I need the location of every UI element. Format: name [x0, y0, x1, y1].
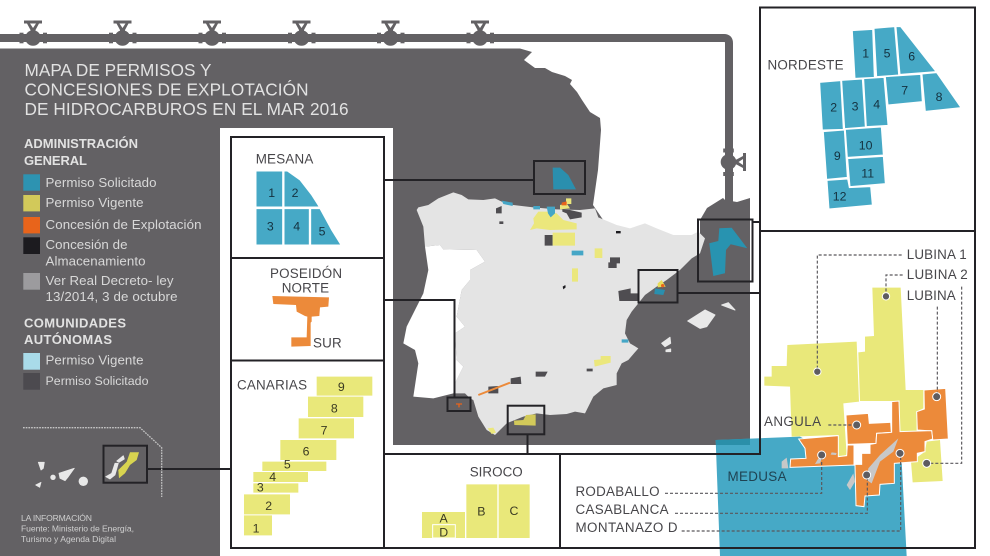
legend: comunidades autónomas: Permiso Solicitado — [46, 374, 149, 388]
panel: Nordeste: 9 — [834, 149, 841, 163]
panel: Siroco: A — [440, 512, 449, 526]
panel: Canarias: 1 — [253, 522, 260, 536]
Balearic islands — [662, 303, 735, 352]
panel: Canarias: 4 — [269, 470, 276, 484]
panel: Lubina map — [665, 255, 962, 556]
labels: Lubina panel: LUBINA 1 — [907, 247, 967, 262]
valve 5 — [377, 20, 404, 46]
legend: administración general: Permiso Vigente — [46, 195, 144, 210]
leader lines — [665, 255, 962, 531]
panel: Poseidón — [270, 266, 342, 350]
heading: POSEIDÓN — [270, 266, 342, 281]
grey fields — [782, 438, 898, 490]
legend: comunidades autónomas — [23, 316, 149, 390]
legend: administración general — [23, 136, 201, 304]
panel: Nordeste: 11 — [861, 166, 874, 180]
panel: Mesana: 4 — [293, 220, 300, 234]
swatch: permiso vigente — [23, 353, 40, 370]
dotted border — [23, 428, 162, 497]
panel: Nordeste — [768, 27, 961, 209]
Lubina 1 block — [764, 342, 859, 457]
panel: Mesana: 3 — [267, 220, 274, 234]
Portugal land — [403, 245, 485, 398]
title: MAPA DE PERMISOS Y — [24, 60, 212, 80]
labels: Lubina panel: ANGULA — [764, 414, 821, 429]
panel: Mesana: 2 — [292, 186, 299, 200]
panel: Canarias: 6 — [303, 444, 310, 458]
valve 3 — [198, 20, 226, 46]
legend: comunidades autónomas: AUTÓNOMAS — [24, 332, 112, 347]
heading: NORDESTE — [768, 58, 844, 72]
legend: administración general: Almacenamiento — [46, 254, 146, 269]
title: DE HIDROCARBUROS EN EL MAR 2016 — [24, 99, 348, 119]
legend: administración general: Concesión de — [46, 237, 128, 252]
Angula concession — [846, 413, 891, 444]
title — [24, 60, 348, 119]
panel: Nordeste: 3 — [852, 99, 859, 113]
source — [21, 513, 134, 544]
legend: comunidades autónomas: COMUNIDADES — [24, 316, 126, 331]
map of Spain — [403, 168, 735, 435]
onshore dark permits — [488, 206, 638, 393]
swatch: permiso vigente — [23, 195, 40, 211]
Lubina 2 block — [858, 288, 923, 432]
islands — [36, 456, 124, 487]
Rodaballo, Casablanca and Montanazo concessions — [790, 401, 933, 507]
panel: Nordeste: 10 — [859, 139, 873, 153]
panel: Nordeste: 7 — [901, 84, 908, 98]
source: LA INFORMACIÓN — [21, 513, 92, 523]
source: Turismo y Agenda Digital — [21, 534, 116, 544]
legend: administración general: Concesión de Explotación — [46, 217, 202, 232]
Medusa block — [716, 437, 907, 556]
legend: comunidades autónomas: Permiso Vigente — [46, 353, 144, 368]
legend: administración general: GENERAL — [24, 153, 87, 168]
legend: administración general: 13/2014, 3 de octubre — [46, 289, 178, 304]
panel: Canarias: 7 — [321, 423, 328, 437]
Medusa overlap with sea — [716, 439, 750, 445]
Nordeste mini — [709, 228, 747, 276]
panel: Siroco: D — [439, 526, 448, 540]
panel: Canarias: 5 — [284, 457, 291, 471]
panel: Nordeste: 5 — [884, 46, 891, 60]
panel: Siroco — [422, 465, 530, 540]
swatch: concesión de almacenamiento — [23, 237, 40, 254]
panel: Siroco: C — [510, 504, 519, 518]
legend: administración general: ADMINISTRACIÓN — [24, 136, 138, 151]
onshore orange spot — [562, 201, 567, 205]
heading: CANARIAS — [237, 378, 307, 393]
title: CONCESIONES DE EXPLOTACIÓN — [24, 80, 308, 100]
Spain land — [417, 192, 705, 435]
Lubina concession — [917, 388, 948, 440]
labels: Lubina panel: LUBINA 2 — [907, 267, 968, 282]
Poseidón block — [272, 296, 329, 347]
swatch: permiso solicitado — [23, 174, 40, 191]
lower right block — [911, 440, 943, 482]
dark sea background — [0, 48, 750, 556]
labels: Lubina panel: MONTANAZO D — [576, 520, 678, 535]
labels: Lubina panel: LUBINA — [907, 288, 956, 303]
Canary Islands inset — [23, 428, 162, 497]
vertical valve — [721, 148, 746, 176]
panel: Nordeste: 2 — [830, 101, 837, 115]
heading: MESANA — [256, 151, 313, 166]
panel: Canarias: 3 — [257, 480, 264, 494]
source: Fuente: Ministerio de Energía, — [21, 524, 134, 534]
panel: Nordeste: 4 — [873, 98, 880, 112]
swatch: permiso solicitado — [23, 373, 40, 390]
legend: administración general: Permiso Solicitado — [46, 175, 156, 190]
panel: Mesana: 5 — [319, 224, 326, 238]
panel: Canarias — [237, 377, 372, 536]
panel: Poseidón: NORTE — [282, 281, 329, 296]
panel: Nordeste: 1 — [862, 46, 869, 60]
panel: Nordeste: 8 — [936, 90, 943, 104]
legend: administración general: Ver Real Decreto- ley — [46, 273, 174, 288]
Mesana mini — [553, 168, 576, 189]
labels: Lubina panel — [576, 247, 968, 535]
panel: Canarias: 9 — [338, 380, 345, 394]
Siroco mini — [514, 414, 536, 426]
onshore black storage — [563, 231, 621, 289]
permit strip — [118, 452, 139, 478]
valve 2 — [109, 20, 136, 46]
panel: Canarias: 2 — [265, 499, 272, 513]
panel: Mesana: 1 — [268, 186, 275, 200]
labels: Lubina panel: MEDUSA — [728, 469, 787, 484]
panel: Poseidón: SUR — [313, 335, 342, 350]
Lubina mini — [654, 280, 666, 295]
panel: Mesana — [256, 151, 341, 245]
labels: Lubina panel: CASABLANCA — [576, 502, 669, 517]
panel: Nordeste: 6 — [908, 49, 915, 63]
labels: Lubina panel: RODABALLO — [576, 484, 660, 499]
Poseidon mini — [456, 403, 462, 407]
pipeline with valves — [0, 20, 746, 205]
swatch: real decreto — [23, 273, 40, 290]
onshore blue permits — [502, 201, 628, 343]
heading: SIROCO — [470, 465, 523, 480]
swatch: concesión de explotación — [23, 217, 40, 233]
valve 6 — [466, 20, 494, 46]
onshore yellow permits — [488, 198, 611, 434]
onshore concession line — [478, 383, 510, 395]
panel: Siroco: B — [477, 505, 485, 519]
field dots — [814, 293, 941, 479]
panel: Canarias: 8 — [331, 402, 338, 416]
valve 4 — [288, 20, 316, 46]
panel: Nordeste: 12 — [833, 190, 847, 204]
valve 1 — [20, 20, 47, 46]
white inset block — [220, 128, 393, 556]
